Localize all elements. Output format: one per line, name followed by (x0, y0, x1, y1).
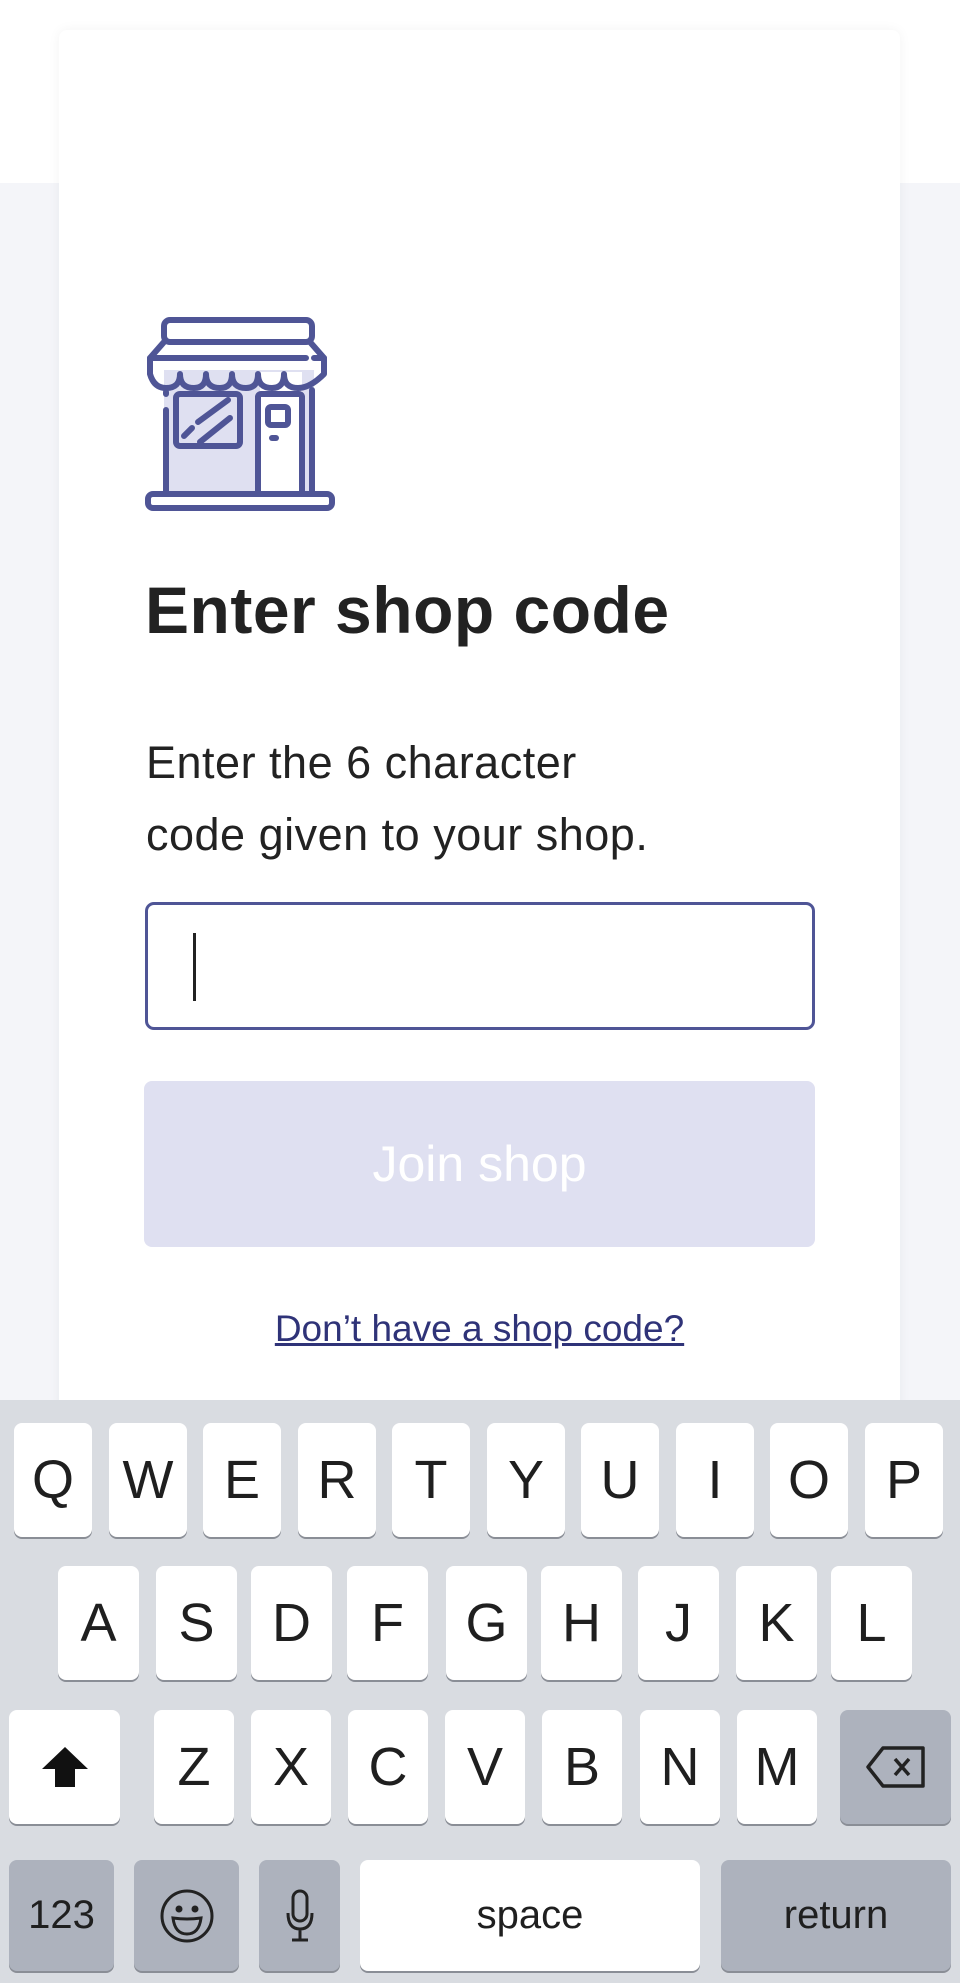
keyboard: G (465, 1593, 508, 1653)
input box (145, 902, 815, 1030)
keyboard: F (371, 1593, 404, 1653)
keyboard: Z (178, 1737, 210, 1797)
heading: Enter shop code (145, 573, 670, 647)
keyboard: H (562, 1593, 601, 1653)
keyboard: O (788, 1450, 830, 1510)
instruction text (146, 737, 648, 860)
keyboard: Q (32, 1450, 74, 1510)
keyboard: E (224, 1450, 260, 1510)
keyboard: A (80, 1593, 117, 1653)
instruction text: code given to your shop. (146, 809, 648, 860)
keyboard: T (414, 1450, 448, 1510)
button: join shop (144, 1081, 815, 1247)
keyboard (0, 1400, 960, 1983)
link: Don’t have a shop code? (275, 1308, 684, 1349)
keyboard: Y (508, 1450, 544, 1510)
keyboard: D (272, 1593, 311, 1653)
card (59, 30, 900, 1430)
button: join shop: Join shop (372, 1136, 587, 1192)
keyboard: C (368, 1737, 408, 1797)
keyboard: space (477, 1893, 583, 1937)
keyboard: U (600, 1450, 640, 1510)
keyboard: J (665, 1593, 692, 1653)
keyboard: 123 (28, 1893, 95, 1937)
keyboard: return (784, 1893, 888, 1937)
instruction text: Enter the 6 character (146, 737, 577, 788)
keyboard: K (758, 1593, 795, 1653)
keyboard: B (564, 1737, 600, 1797)
keyboard: X (273, 1737, 309, 1797)
keyboard: P (886, 1450, 922, 1510)
keyboard: M (754, 1737, 799, 1797)
keyboard: R (318, 1450, 356, 1510)
keyboard: L (856, 1593, 887, 1653)
keyboard: S (178, 1593, 215, 1653)
keyboard: V (467, 1737, 503, 1797)
keyboard: N (660, 1737, 700, 1797)
keyboard: W (123, 1450, 173, 1510)
keyboard: I (707, 1450, 722, 1510)
icon: shop (145, 317, 335, 511)
